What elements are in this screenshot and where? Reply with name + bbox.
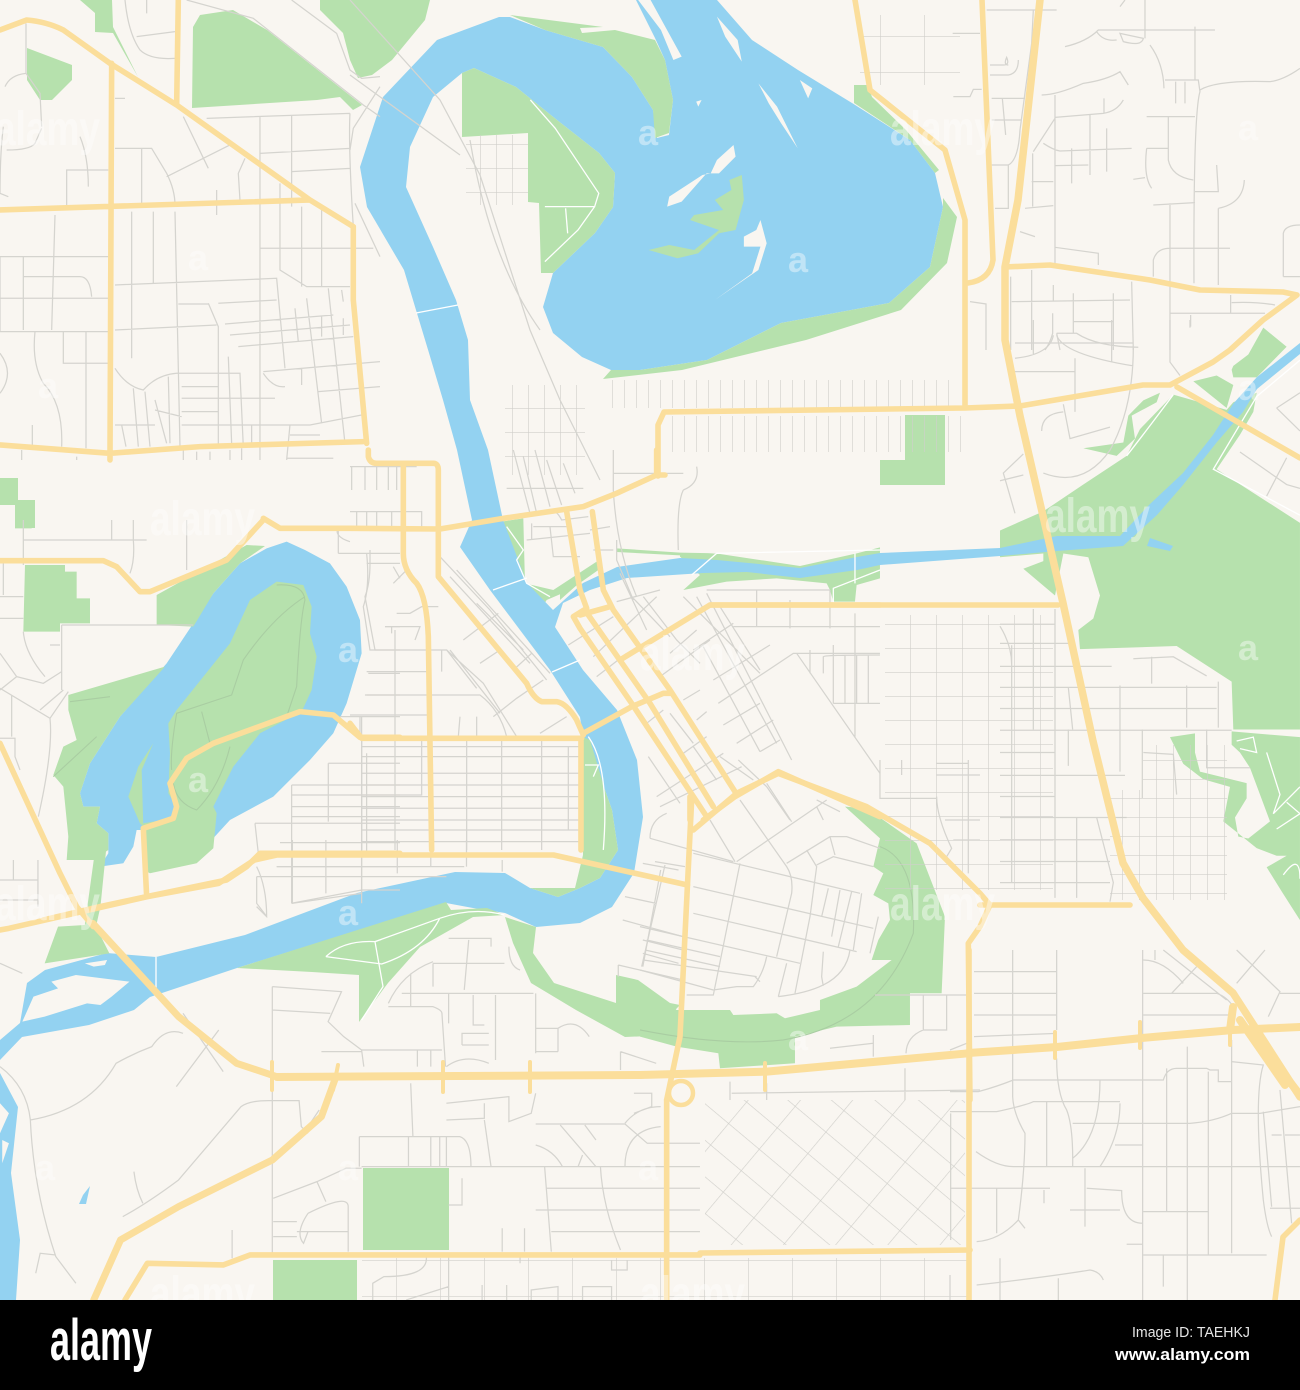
watermark text: a: [638, 112, 659, 153]
road: south cross street east: [700, 1250, 970, 1253]
park: large east forest: [1000, 328, 1300, 920]
water: forest pond: [1147, 538, 1173, 551]
park: north river bank: [320, 0, 430, 78]
island: thin strips: [638, 0, 812, 148]
streets: north centre: [860, 15, 960, 85]
watermark text: a: [188, 237, 209, 278]
watermark text: alamy: [150, 1268, 255, 1321]
watermark text: alamy: [150, 493, 255, 546]
park: north-west small block: [27, 48, 72, 100]
park: small west blocks: [0, 478, 35, 528]
trails: east golf: [1237, 737, 1300, 879]
park: junction of river branch: [502, 518, 598, 617]
watermark text: a: [638, 1147, 659, 1188]
streets: east of highway upper: [1110, 790, 1143, 900]
streets: north row two: [665, 416, 965, 452]
road: overpasses: [272, 1015, 1230, 1092]
park: south squares: [273, 1168, 449, 1300]
island: crescent: [715, 220, 767, 300]
watermark text: a: [338, 1147, 359, 1188]
park: north-west block: [192, 10, 362, 110]
road: south arterial east: [968, 1027, 1300, 1053]
water: main river and oxbow lake: [0, 0, 1300, 1060]
watermark text: alamy: [640, 1268, 745, 1321]
road: downtown west: [263, 450, 665, 850]
watermark text: a: [338, 892, 359, 933]
park: central strip by river: [530, 737, 618, 897]
park: north strip: [80, 0, 138, 77]
watermark text: alamy: [890, 878, 995, 931]
streets: south lower row: [362, 1258, 967, 1300]
watermark text: a: [338, 629, 359, 670]
road: north-west diagonal and verticals: [0, 0, 367, 460]
streets: east central grid: [885, 615, 1053, 890]
road: south arterial west: [277, 1075, 640, 1077]
trails: south-west park: [326, 912, 504, 1020]
park: square block: [880, 415, 945, 485]
streets: east of highway: [1143, 745, 1227, 900]
watermark text: a: [38, 365, 59, 406]
forest and east river banks under water: [502, 328, 1300, 920]
park: far west riverside: [18, 840, 109, 983]
road: south-east lower: [969, 950, 1300, 1300]
watermark text: a: [1238, 627, 1259, 668]
park: west loop surroundings: [15, 520, 317, 888]
road: east lower: [980, 902, 1130, 908]
water: south-west channel: [0, 1073, 20, 1300]
island: west channel: [0, 960, 129, 1163]
road: north-east verticals: [855, 0, 993, 405]
bridges: [156, 305, 580, 990]
streets: traced west loop: [0, 520, 400, 917]
streets: traced downtown west: [350, 450, 697, 850]
streets: traced south-west: [0, 840, 700, 1300]
watermark text: a: [788, 1017, 809, 1058]
watermark text: a: [1238, 367, 1259, 408]
streets: traced north-west: [0, 0, 380, 460]
park: inner bend peninsula: [462, 68, 615, 273]
streets: traced south central: [640, 760, 980, 1100]
road: lake-side arterial: [658, 265, 1300, 605]
streets: north row: [610, 380, 960, 408]
water: west oxbow loop: [80, 542, 362, 867]
trails: loop island: [53, 585, 305, 810]
road: highway: [1005, 0, 1300, 1097]
park: east branch band: [560, 547, 880, 602]
trails: south park: [640, 847, 914, 1042]
park: south-west bank: [237, 902, 505, 1022]
website: www.alamy.com: [1114, 1345, 1250, 1364]
trails: forest: [1127, 360, 1300, 515]
parks and green areas: [0, 0, 957, 1300]
park: south band west part: [505, 917, 680, 1037]
streets: south diagonal district: [705, 1100, 965, 1245]
image id: Image ID: TAEHKJ: [1132, 1324, 1250, 1341]
road: central south: [640, 773, 990, 1300]
watermark text: a: [1238, 107, 1259, 148]
watermark text: a: [788, 239, 809, 280]
trails: peninsula: [530, 100, 599, 262]
road: interchange: [1230, 1007, 1300, 1095]
water: pond: [79, 1186, 90, 1204]
streets: below peninsula: [505, 385, 585, 475]
road: circle interchange: [669, 1081, 693, 1105]
park: lake north-east shore: [854, 85, 939, 173]
white trails and bridges: [156, 100, 1300, 1020]
watermark text: a: [188, 759, 209, 800]
streets: mid north rail: [350, 0, 600, 480]
park: south river band: [640, 807, 945, 1068]
streets: traced south-east: [950, 950, 1300, 1300]
road: west loop: [0, 520, 400, 927]
streets: traced east lower: [1000, 320, 1300, 902]
trails: river junction: [507, 527, 605, 850]
watermark text: alamy: [640, 628, 745, 681]
road: downtown avenues: [567, 512, 880, 820]
footer bar: [0, 1300, 1300, 1390]
park trails: [53, 585, 914, 1042]
watermark text: alamy: [1045, 490, 1150, 543]
park: lake south shore: [603, 198, 957, 379]
island: green lake island: [649, 175, 744, 258]
park: north bank of river: [510, 15, 673, 138]
alamy logo: alamy: [50, 1308, 152, 1373]
streets: north peninsula: [466, 135, 528, 205]
islands: [638, 0, 812, 300]
streets: traced downtown east: [568, 540, 880, 820]
trails: branch: [692, 550, 880, 603]
island: large lake island: [667, 145, 736, 207]
streets: traced north-east: [953, 0, 1300, 350]
road: upper south west: [0, 855, 700, 1300]
watermark text: alamy: [890, 103, 995, 156]
watermark text: a: [35, 1147, 56, 1188]
